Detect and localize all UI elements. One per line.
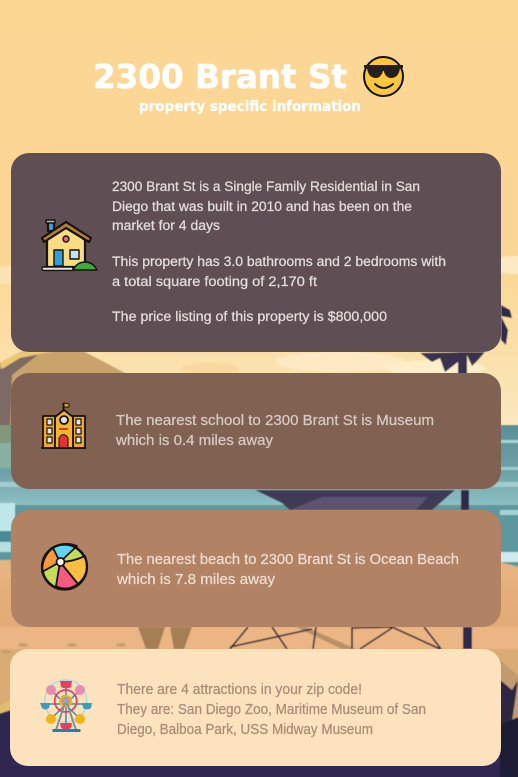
- text: nearest beach: which is 7.8 miles away: [116, 572, 276, 588]
- icon: house: [42, 220, 97, 270]
- panel: attractions: [10, 649, 501, 766]
- icon: school: [41, 403, 86, 448]
- text: nearest school: which is 0.4 miles away: [115, 433, 274, 449]
- icon: beach ball: [42, 544, 87, 590]
- subtitle: property specific information: [139, 99, 361, 115]
- panel: property details: [11, 153, 501, 352]
- text: attractions: They are: San Diego Zoo, Maritime Museum of San: [117, 702, 426, 718]
- text: property description: market for 4 days: [112, 218, 220, 233]
- text: attractions: [117, 682, 426, 738]
- text: attractions: Diego, Balboa Park, USS Midway Museum: [117, 722, 373, 738]
- text: attractions: There are 4 attractions in your zip code!: [117, 682, 362, 698]
- text: property description: 2300 Brant St is a Single Family Residential in San: [112, 179, 420, 194]
- text: nearest school: [115, 413, 434, 449]
- text: property description: [112, 179, 446, 324]
- panel: nearest school: [11, 373, 501, 489]
- text: property description: This property has 3.0 bathrooms and 2 bedrooms with: [112, 254, 446, 269]
- text: nearest school: The nearest school to 2300 Brant St is Museum: [116, 413, 434, 429]
- text: property description: The price listing of this property is $800,000: [112, 309, 387, 324]
- title: 2300 Brant St: [93, 57, 347, 96]
- text: nearest beach: [116, 552, 459, 588]
- icon: ferris wheel: [40, 680, 92, 732]
- icon: sunglasses emoji: [364, 57, 403, 96]
- panel: nearest beach: [11, 510, 501, 627]
- text: nearest beach: The nearest beach to 2300 Brant St is Ocean Beach: [117, 552, 459, 568]
- text: property description: a total square footing of 2,170 ft: [112, 274, 317, 289]
- text: property description: Diego that was built in 2010 and has been on the: [112, 199, 412, 214]
